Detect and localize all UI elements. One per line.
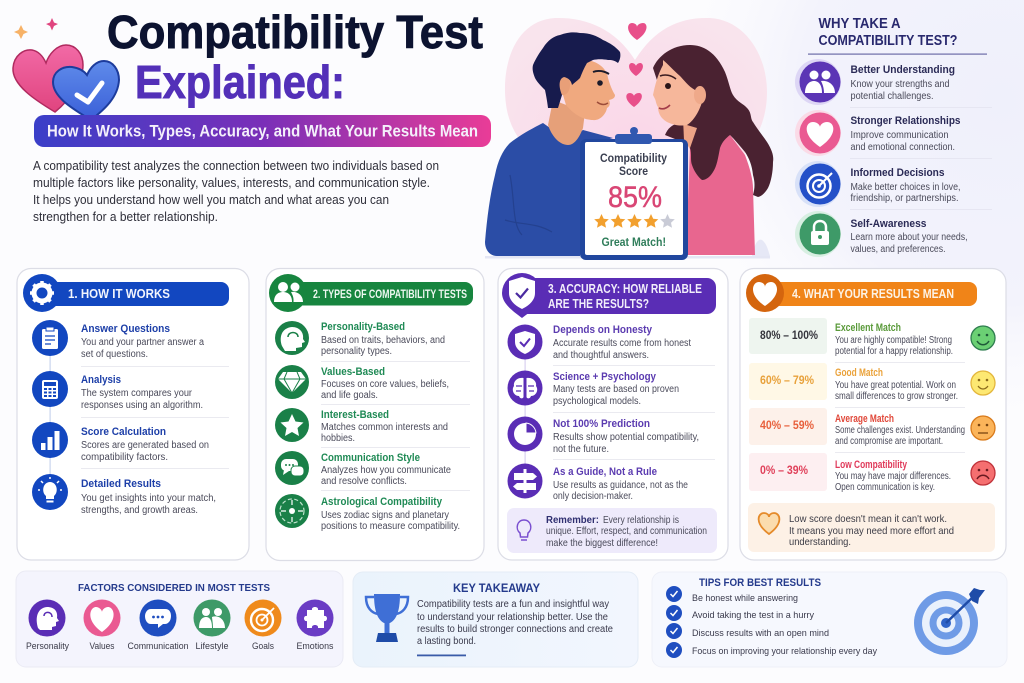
subtitle pill: How It Works, Types, Accuracy, and What Your Results Mean	[47, 122, 478, 140]
type: personality-based: Based on traits, behaviors, and	[321, 335, 445, 346]
type: communication style	[275, 451, 451, 487]
item: informed decisions: Informed Decisions	[850, 167, 944, 179]
tip: honest: Be honest while answering	[692, 593, 798, 604]
type: values-based: and life goals.	[321, 390, 378, 401]
type: values-based: Focuses on core values, beliefs,	[321, 379, 449, 390]
type: interest-based	[275, 408, 448, 444]
item: informed decisions	[795, 161, 960, 207]
item: self-awareness: values, and preferences.	[850, 244, 946, 255]
factor: values: Values	[90, 641, 115, 651]
item: science and psychology: Science + Psychology	[553, 371, 657, 383]
icon: trophy	[366, 594, 408, 642]
callout: remember: Every relationship is	[603, 515, 679, 526]
type: communication style: and resolve conflicts.	[321, 476, 407, 487]
panel: results meaning	[740, 268, 1006, 560]
factor: lifestyle	[194, 600, 230, 651]
icon: sad face	[971, 461, 995, 485]
step: analysis: responses using an algorithm.	[81, 400, 203, 411]
item: self-awareness	[795, 211, 968, 257]
row: good match	[749, 363, 995, 402]
intro paragraph: It helps you understand how well you match and what areas you can	[33, 192, 389, 207]
title	[107, 6, 483, 108]
row: excellent match: potential for a happy relationship.	[835, 346, 953, 357]
heading: FACTORS CONSIDERED IN MOST TESTS	[78, 582, 270, 594]
item: informed decisions: Make better choices in love,	[850, 182, 960, 193]
panel: how it works	[17, 268, 249, 560]
title: Explained:	[135, 56, 345, 108]
type: communication style: Analyzes how you communicate	[321, 465, 451, 476]
heading: KEY TAKEAWAY	[453, 581, 540, 595]
section header: 1. HOW IT WORKS	[68, 286, 170, 301]
row: good match: You have great potential. Work on	[835, 380, 956, 391]
item: not 100% prediction: not the future.	[553, 444, 609, 455]
type: astrological compatibility: Uses zodiac signs and planetary	[321, 510, 449, 521]
item: better understanding: Know your strengths and	[850, 79, 950, 90]
star rating	[594, 214, 675, 228]
icon: light bulb	[517, 520, 531, 540]
item: guide, not rule: As a Guide, Not a Rule	[553, 466, 657, 478]
item: stronger relationships: Stronger Relationships	[850, 115, 960, 127]
item: self-awareness: Self-Awareness	[850, 218, 926, 230]
icon: target with arrow	[914, 588, 985, 655]
item: not 100% prediction: Results show potential compatibility,	[553, 432, 699, 443]
takeaway text: a lasting bond.	[417, 636, 476, 647]
section header	[502, 273, 716, 318]
row: low compatibility: 0% – 39%	[760, 465, 808, 477]
item: depends on honesty: and thoughtful answers.	[553, 350, 649, 361]
tip: honest	[666, 586, 798, 604]
score heading: Score	[619, 164, 648, 178]
tip: no hurry	[666, 605, 814, 621]
tip: open mind: Discuss results with an open mind	[692, 628, 829, 639]
factor: emotions	[296, 600, 334, 651]
icon: orange heart	[759, 513, 779, 534]
row: low compatibility	[749, 453, 995, 493]
factor: goals: Goals	[252, 641, 274, 651]
row: good match: small differences to grow stronger.	[835, 391, 958, 402]
factor: personality: Personality	[26, 641, 69, 651]
step: answer questions: Answer Questions	[81, 323, 170, 335]
step: analysis: The system compares your	[81, 388, 193, 399]
item: better understanding	[795, 59, 955, 105]
type: values-based	[275, 365, 449, 401]
panel: why take a test	[795, 16, 992, 257]
icon: background heart	[505, 18, 767, 257]
factor: values	[84, 600, 120, 651]
type: interest-based: Matches common interests and	[321, 422, 448, 433]
item: science and psychology	[508, 370, 679, 407]
factor: goals	[244, 600, 282, 651]
title: Compatibility Test	[107, 6, 483, 58]
row: good match: 60% – 79%	[760, 375, 814, 387]
row: average match: 40% – 59%	[760, 420, 814, 432]
icon: shield	[509, 277, 535, 309]
row: good match: Good Match	[835, 367, 883, 379]
factor: communication	[128, 600, 188, 651]
panel: key takeaway	[353, 572, 638, 667]
icon: happy face	[971, 326, 995, 350]
callout: low score note: Low score doesn't mean it can't work.	[789, 513, 947, 525]
step: answer questions	[32, 320, 205, 360]
item: self-awareness: Learn more about your needs,	[850, 232, 968, 243]
item: better understanding: potential challenges.	[850, 91, 934, 102]
score value: 85%	[608, 181, 662, 214]
item: stronger relationships	[795, 110, 960, 156]
step: analysis	[32, 371, 203, 411]
step: analysis: Analysis	[81, 374, 121, 386]
illustration: couple with compatibility score	[485, 18, 773, 260]
factor: personality	[26, 600, 69, 651]
section header: 4. WHAT YOUR RESULTS MEAN	[792, 287, 954, 301]
score verdict: Great Match!	[602, 237, 666, 249]
step: detailed results	[32, 474, 216, 516]
item: depends on honesty: Depends on Honesty	[553, 324, 653, 336]
row: average match: and compromise are important.	[835, 436, 943, 447]
section header: ARE THE RESULTS?	[548, 297, 649, 311]
tip: open mind	[666, 623, 829, 639]
tip: improve	[666, 642, 877, 658]
step: score calculation: compatibility factors.	[81, 452, 168, 463]
section header: 3. ACCURACY: HOW RELIABLE	[548, 282, 702, 296]
type: interest-based: hobbies.	[321, 433, 355, 444]
item: better understanding: Better Understanding	[850, 64, 955, 76]
type: personality-based: personality types.	[321, 346, 392, 357]
factor: lifestyle: Lifestyle	[196, 641, 228, 651]
item: guide, not rule: only decision-maker.	[553, 491, 633, 502]
factor: emotions: Emotions	[296, 641, 334, 651]
item: guide, not rule	[508, 464, 688, 502]
item: depends on honesty	[508, 324, 691, 361]
panel: tips	[652, 572, 1007, 667]
item: informed decisions: friendship, or partnerships.	[850, 193, 958, 204]
row: average match	[749, 408, 995, 447]
icon: sparkles	[14, 18, 58, 39]
score heading	[600, 151, 667, 178]
tip: no hurry: Avoid taking the test in a hurry	[692, 610, 814, 621]
takeaway text: to understand your relationship better. Use the	[417, 612, 608, 623]
score heading: Compatibility	[600, 151, 667, 165]
item: guide, not rule: Use results as guidance, not as the	[553, 480, 688, 491]
step: score calculation: Score Calculation	[81, 426, 166, 438]
callout: low score note: It means you may need more effort and	[789, 525, 954, 537]
step: score calculation	[32, 422, 209, 463]
takeaway text: results to build stronger connections and create	[417, 624, 613, 635]
type: personality-based	[275, 321, 445, 357]
callout: low score note: understanding.	[789, 536, 851, 548]
panel: factors considered	[16, 571, 343, 667]
callout: remember: Remember:	[546, 514, 599, 526]
row: low compatibility: Open communication is key.	[835, 482, 935, 493]
intro paragraph	[33, 158, 439, 224]
type: astrological compatibility: Astrological Compatibility	[321, 496, 443, 508]
woman	[653, 45, 773, 255]
icon: smiling face	[971, 371, 995, 395]
item: science and psychology: Many tests are based on proven	[553, 384, 679, 395]
icon: neutral face	[971, 416, 995, 440]
type: interest-based: Interest-Based	[321, 409, 389, 421]
section header: 2. TYPES OF COMPATIBILITY TESTS	[313, 287, 467, 301]
callout: remember: make the biggest difference!	[546, 538, 658, 549]
item: not 100% prediction: Not 100% Prediction	[553, 418, 650, 430]
row: average match: Average Match	[835, 413, 894, 425]
factor: communication: Communication	[128, 641, 188, 651]
item: not 100% prediction	[508, 416, 699, 455]
type: personality-based: Personality-Based	[321, 321, 405, 333]
takeaway text: Compatibility tests are a fun and insightful way	[417, 599, 609, 610]
intro paragraph: multiple factors like personality, values, interests, and communication style.	[33, 175, 430, 190]
step: detailed results: strengths, and growth areas.	[81, 505, 198, 516]
heading: WHY TAKE A	[818, 16, 901, 32]
row: excellent match: You are highly compatible! Strong	[835, 335, 952, 346]
step: detailed results: Detailed Results	[81, 478, 161, 490]
subtitle pill	[34, 115, 491, 147]
section header	[269, 274, 473, 312]
row: low compatibility: Low Compatibility	[835, 459, 908, 471]
row: average match: Some challenges exist. Understanding	[835, 425, 965, 436]
type: astrological compatibility: positions to measure compatibility.	[321, 521, 460, 532]
row: excellent match: Excellent Match	[835, 322, 901, 334]
icon: floating hearts	[626, 23, 647, 107]
icon: pink and blue hearts	[13, 45, 119, 120]
icon: people	[274, 282, 303, 302]
callout: remember: unique. Effort, respect, and communication	[546, 526, 707, 537]
intro paragraph: strengthen for a better relationship.	[33, 209, 218, 224]
panel: types of compatibility tests	[266, 268, 484, 560]
row: excellent match: 80% – 100%	[760, 330, 818, 342]
panel: accuracy	[498, 268, 728, 560]
clipboard	[580, 127, 688, 260]
type: values-based: Values-Based	[321, 366, 385, 378]
section header	[23, 274, 229, 312]
heading: TIPS FOR BEST RESULTS	[699, 577, 821, 589]
type: communication style: Communication Style	[321, 452, 420, 464]
step: score calculation: Scores are generated based on	[81, 440, 209, 451]
callout: low score note	[748, 503, 995, 552]
heading: COMPATIBILITY TEST?	[818, 33, 958, 49]
item: stronger relationships: and emotional connection.	[850, 142, 955, 153]
item: science and psychology: psychological models.	[553, 396, 641, 407]
takeaway text	[417, 599, 613, 647]
step: detailed results: You get insights into your match,	[81, 493, 216, 504]
step: answer questions: set of questions.	[81, 349, 148, 360]
tip: improve: Focus on improving your relationship every day	[692, 646, 877, 657]
intro paragraph: A compatibility test analyzes the connection between two individuals based on	[33, 158, 439, 173]
icon: gear	[30, 281, 54, 305]
row: low compatibility: You may have major differences.	[835, 471, 951, 482]
item: depends on honesty: Accurate results come from honest	[553, 338, 691, 349]
row: excellent match	[749, 318, 995, 357]
type: astrological compatibility	[275, 494, 460, 532]
section header	[746, 274, 977, 312]
icon: heart	[753, 282, 777, 306]
man	[485, 32, 620, 256]
callout: remember	[507, 508, 717, 553]
heading	[818, 16, 958, 49]
step: answer questions: You and your partner answer a	[81, 337, 205, 348]
item: stronger relationships: Improve communication	[850, 130, 948, 141]
